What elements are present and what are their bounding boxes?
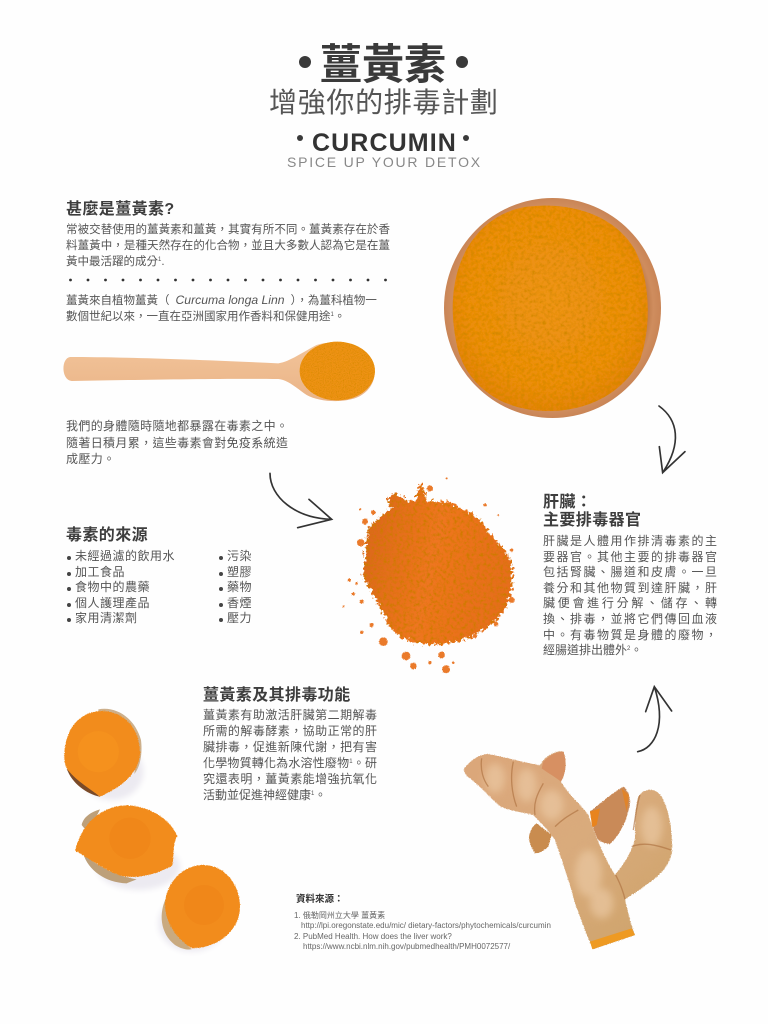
title: CURCUMIN: CURCUMIN bbox=[312, 129, 457, 157]
image: fresh turmeric slices bbox=[64, 709, 240, 952]
list: right column: 污染 bbox=[227, 549, 252, 563]
text block: 包括腎臟、腸道和皮膚。一旦 bbox=[543, 565, 717, 579]
text block: 常被交替使用的薑黃素和薑黃，其實有所不同。薑黃素存在於香 bbox=[66, 224, 390, 236]
text block bbox=[543, 534, 717, 657]
panel: what is curcumin bbox=[66, 200, 390, 323]
text block: 經腸道排出體外2。 bbox=[543, 643, 642, 657]
image: pile of turmeric powder bbox=[342, 477, 515, 673]
list: right column: 藥物 bbox=[227, 580, 252, 594]
text block: toxins in daily life bbox=[66, 419, 288, 466]
heading: 資料來源： bbox=[296, 894, 344, 905]
arrow: spoon text to powder pile bbox=[270, 473, 332, 528]
list: left column: 加工食品 bbox=[75, 565, 125, 579]
text block: toxins in daily life: 成壓力。 bbox=[66, 452, 115, 466]
text block: 薑黃素有助激活肝臟第二期解毒 bbox=[203, 708, 377, 722]
text block: toxins in daily life: 我們的身體隨時隨地都暴露在毒素之中。 bbox=[66, 419, 288, 433]
text block: 活動並促進神經健康1。 bbox=[203, 788, 326, 802]
text block: 中。有毒物質是身體的廢物， bbox=[543, 628, 717, 642]
text block: toxins in daily life: 隨著日積月累，這些毒素會對免疫系統造 bbox=[66, 436, 288, 450]
panel: curcumin and detox bbox=[203, 686, 377, 802]
subtitle: English: SPICE UP YOUR DETOX bbox=[287, 154, 482, 170]
heading bbox=[543, 493, 641, 529]
text block: 肝臟是人體用作排清毒素的主 bbox=[543, 534, 717, 548]
list: right column: 香煙 bbox=[227, 596, 252, 610]
list: left column bbox=[67, 549, 175, 625]
text block: 化學物質轉化為水溶性廢物1。研 bbox=[203, 756, 377, 770]
title block bbox=[269, 41, 499, 170]
image: wooden bowl of turmeric powder bbox=[444, 198, 661, 418]
text block: 臟排毒，促進新陳代謝，把有害 bbox=[203, 740, 377, 754]
list: left column: 食物中的農藥 bbox=[75, 580, 150, 594]
reference list: 2. PubMed Health. How does the liver work? bbox=[294, 932, 452, 941]
list: left column: 個人護理產品 bbox=[75, 596, 150, 610]
text block: plant origin bbox=[66, 293, 377, 323]
text block: plant origin: 數個世紀以來，一直在亞洲國家用作香料和保健用途1。 bbox=[66, 311, 345, 323]
list: right column: 塑膠 bbox=[227, 565, 252, 579]
text block: 換、排毒，並將它們傳回血液 bbox=[543, 612, 717, 626]
reference list bbox=[294, 911, 551, 951]
panel: sources of toxins bbox=[66, 526, 252, 625]
arrow: bowl down to liver text bbox=[659, 406, 685, 473]
text block: plant origin: 薑黃來自植物薑黃（ Curcuma longa Linn ），為薑科植物一 bbox=[66, 293, 377, 307]
list: left column: 家用清潔劑 bbox=[75, 611, 138, 625]
panel: references bbox=[294, 894, 551, 951]
text block bbox=[66, 223, 390, 268]
reference list: https://www.ncbi.nlm.nih.gov/pubmedhealth/PMH0072577/ bbox=[303, 942, 510, 951]
dotted divider marks bbox=[69, 279, 387, 281]
heading: 主要排毒器官 bbox=[543, 512, 641, 529]
list: right column: 壓力 bbox=[227, 611, 252, 625]
panel: liver bbox=[543, 493, 717, 657]
subtitle: Chinese: 增強你的排毒計劃 bbox=[269, 87, 499, 118]
heading: 薑黃素及其排毒功能 bbox=[203, 687, 351, 704]
heading: 肝臟： bbox=[543, 494, 592, 511]
image: wooden spoon with turmeric bbox=[63, 342, 375, 401]
arrow: root up to liver text bbox=[638, 687, 672, 752]
text block: 究還表明，薑黃素能增強抗氧化 bbox=[203, 772, 377, 786]
title: Chinese: 薑黃素 bbox=[320, 41, 446, 88]
text block: 養分和其他物質到達肝臟，肝 bbox=[543, 581, 717, 595]
text block bbox=[203, 708, 377, 802]
heading: 毒素的來源 bbox=[66, 527, 148, 544]
image: turmeric root bbox=[464, 751, 672, 949]
text block: 所需的解毒酵素，協助正常的肝 bbox=[203, 724, 377, 738]
text block: 臟便會進行分解、儲存、轉 bbox=[543, 596, 717, 610]
reference list: http://lpi.oregonstate.edu/mic/ dietary-factors/phytochemicals/curcumin bbox=[301, 921, 551, 930]
list: left column: 未經過濾的飲用水 bbox=[75, 549, 175, 563]
reference list: 1. 俄勒岡州立大學 薑黃素 bbox=[294, 911, 385, 920]
heading: 甚麼是薑黃素? bbox=[66, 201, 175, 218]
text block: 黃中最活躍的成分1. bbox=[66, 256, 165, 268]
text block: 料薑黃中，是種天然存在的化合物，並且大多數人認為它是在薑 bbox=[66, 240, 390, 252]
list: right column bbox=[219, 549, 252, 625]
text block: 要器官。其他主要的排毒器官 bbox=[543, 550, 717, 564]
